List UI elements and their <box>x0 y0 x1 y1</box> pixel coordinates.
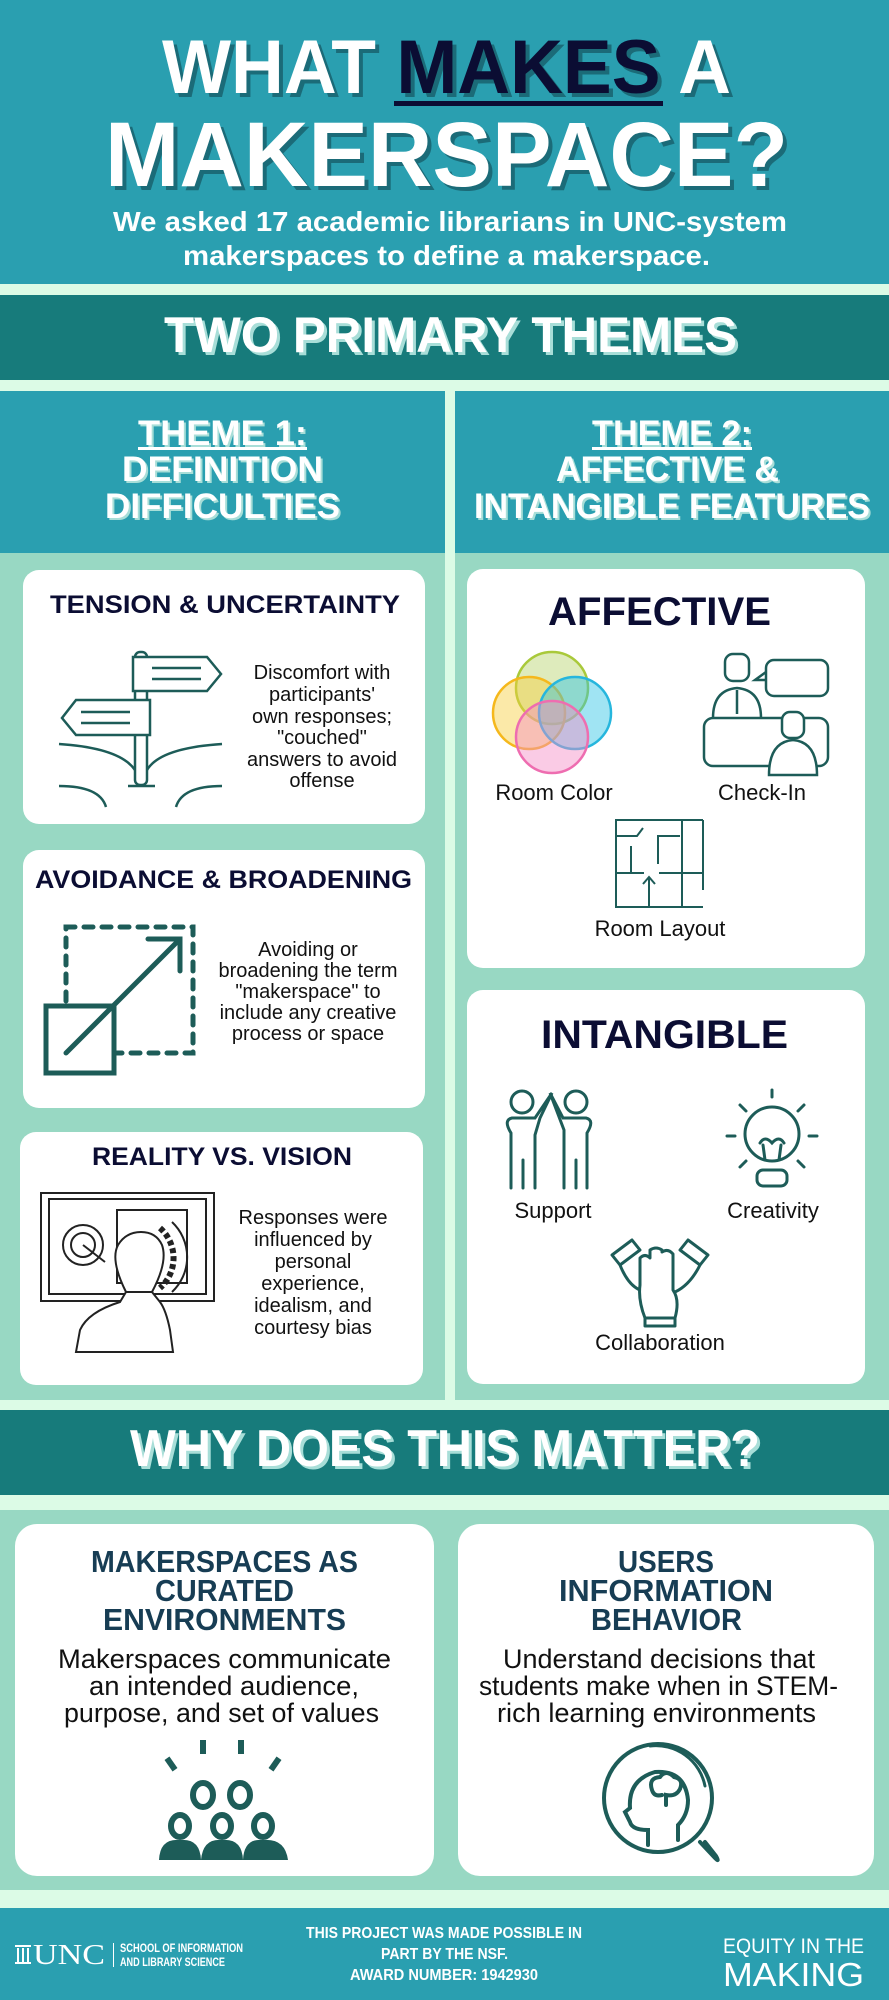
card: intangible: Collaboration <box>595 1330 725 1355</box>
label: support / creativity: Creativity <box>727 1198 819 1223</box>
card: curated environments: CURATED <box>155 1573 294 1608</box>
icon: collaboration hands <box>612 1240 708 1326</box>
panel: why section <box>0 1510 889 1890</box>
icon: expand arrow <box>46 927 193 1073</box>
theme 2 heading: INTANGIBLE FEATURES <box>476 489 872 528</box>
icon: venn room color <box>493 652 611 773</box>
card: intangible <box>467 990 865 1384</box>
label: room color / check-in: Room Color <box>495 780 613 805</box>
card: curated environments: ENVIRONMENTS <box>103 1602 346 1637</box>
banner: two primary themes: TWO PRIMARY THEMES <box>164 307 737 363</box>
text: tension: participants' <box>269 684 375 706</box>
card: affective: Room Layout <box>595 916 725 941</box>
title: WHAT MAKES A <box>162 25 731 110</box>
footer text <box>306 1925 582 1984</box>
card: reality vs vision <box>20 1132 423 1385</box>
card: users information behavior <box>458 1524 874 1876</box>
text: reality: Responses were <box>239 1207 387 1229</box>
banner: two primary themes <box>0 295 889 380</box>
theme 2 heading: THEME 2: <box>592 414 752 453</box>
theme 2 heading: AFFECTIVE & <box>558 452 781 491</box>
text: reality: influenced by <box>254 1229 372 1251</box>
card: users information behavior: BEHAVIOR <box>591 1602 742 1637</box>
title <box>105 25 792 210</box>
text: avoidance: process or space <box>232 1023 384 1045</box>
card: users information behavior: USERS <box>618 1544 714 1579</box>
text: avoidance: broadening the term <box>218 960 398 982</box>
card: tension & uncertainty: TENSION & UNCERTAINTY <box>50 591 400 619</box>
icon: person at screen <box>41 1193 214 1352</box>
text: avoidance <box>218 939 398 1045</box>
label: room color / check-in <box>495 780 806 805</box>
footer text: THIS PROJECT WAS MADE POSSIBLE IN <box>306 1925 582 1942</box>
label: room color / check-in: Check-In <box>718 780 806 805</box>
card: curated environments: Makerspaces communicate <box>58 1644 391 1674</box>
icon: head in magnifier <box>604 1744 718 1860</box>
icon: signpost <box>59 652 222 807</box>
banner: two primary themes: TWO PRIMARY THEMES <box>167 310 740 366</box>
theme 2 heading: THEME 2: <box>594 416 754 455</box>
footer text: AWARD NUMBER: 1942930 <box>350 1967 538 1984</box>
footer text: PART BY THE NSF. <box>381 1946 508 1963</box>
text: tension: "couched" <box>277 727 367 749</box>
title: MAKERSPACE? <box>109 108 792 210</box>
logo: UNC: UNC <box>33 1940 105 1971</box>
title: WHAT MAKES A <box>166 29 735 114</box>
text: tension: own responses; <box>252 706 392 728</box>
theme 2 heading <box>474 414 872 528</box>
footer <box>0 1908 889 2000</box>
text: tension: Discomfort with <box>254 662 390 684</box>
card: avoidance & broadening: AVOIDANCE & BROADENING <box>35 866 412 894</box>
banner: why does this matter: WHY DOES THIS MATTER? <box>133 1423 763 1481</box>
text: tension: answers to avoid <box>247 749 397 771</box>
subtitle: We asked 17 academic librarians in UNC-system <box>113 206 787 237</box>
theme 1 heading: DIFFICULTIES <box>107 489 342 528</box>
card: curated environments: an intended audience, <box>89 1671 359 1701</box>
text: reality: experience, <box>261 1273 365 1295</box>
logo: equity in the making: EQUITY IN THE <box>723 1935 864 1958</box>
text: reality: courtesy bias <box>254 1317 372 1339</box>
text: reality: personal <box>275 1251 351 1273</box>
card: curated environments <box>15 1524 434 1876</box>
panel: theme 1 column <box>0 391 445 1400</box>
logo: equity in the making <box>723 1935 864 1993</box>
card: affective: AFFECTIVE <box>548 590 771 634</box>
theme 1 heading: THEME 1: <box>140 416 309 455</box>
card: users information behavior: students make when in STEM- <box>479 1671 838 1701</box>
panel: theme 2 column <box>455 391 889 1400</box>
card: curated environments: MAKERSPACES AS <box>91 1544 358 1579</box>
theme 1 heading <box>105 414 342 528</box>
label: support / creativity <box>514 1198 819 1223</box>
icon: room layout <box>616 820 703 907</box>
banner: why does this matter: WHY DOES THIS MATTER? <box>130 1420 760 1478</box>
icon: support high five <box>507 1091 591 1188</box>
icon: audience <box>159 1740 288 1860</box>
title: MAKERSPACE? <box>105 104 788 206</box>
theme 1 heading: THEME 1: <box>138 414 307 453</box>
theme 1 heading: DEFINITION <box>122 450 323 489</box>
logo: UNC: SCHOOL OF INFORMATION <box>120 1941 243 1955</box>
card: intangible: INTANGIBLE <box>541 1013 788 1057</box>
icon: creativity bulb <box>727 1090 817 1186</box>
header band <box>0 0 889 284</box>
logo: UNC <box>15 1940 243 1971</box>
card: curated environments: purpose, and set of values <box>64 1698 379 1728</box>
theme 2 heading: AFFECTIVE & <box>556 450 779 489</box>
text: reality: idealism, and <box>254 1295 372 1317</box>
logo: equity in the making: MAKING <box>723 1956 864 1993</box>
theme 1 heading: DIFFICULTIES <box>105 487 340 526</box>
label: support / creativity: Support <box>514 1198 592 1223</box>
logo: UNC: AND LIBRARY SCIENCE <box>120 1955 225 1969</box>
card: reality vs vision: REALITY VS. VISION <box>92 1143 352 1171</box>
text: avoidance: "makerspace" to <box>235 981 381 1003</box>
text: tension: offense <box>289 770 355 792</box>
theme 2 heading: INTANGIBLE FEATURES <box>474 487 870 526</box>
card: users information behavior: rich learning environments <box>497 1698 816 1728</box>
text: tension <box>247 662 397 792</box>
card: users information behavior: INFORMATION <box>559 1573 773 1608</box>
theme 1 heading: DEFINITION <box>124 452 325 491</box>
subtitle <box>113 206 787 271</box>
card: tension & uncertainty <box>23 570 425 824</box>
card: users information behavior: Understand decisions that <box>503 1644 815 1674</box>
card: affective <box>467 569 865 968</box>
text: reality <box>239 1207 387 1339</box>
text: avoidance: include any creative <box>220 1002 396 1024</box>
icon: check-in <box>704 654 828 775</box>
card: avoidance & broadening <box>23 850 425 1108</box>
subtitle: makerspaces to define a makerspace. <box>183 240 710 271</box>
banner: why does this matter <box>0 1410 889 1495</box>
text: avoidance: Avoiding or <box>258 939 358 961</box>
